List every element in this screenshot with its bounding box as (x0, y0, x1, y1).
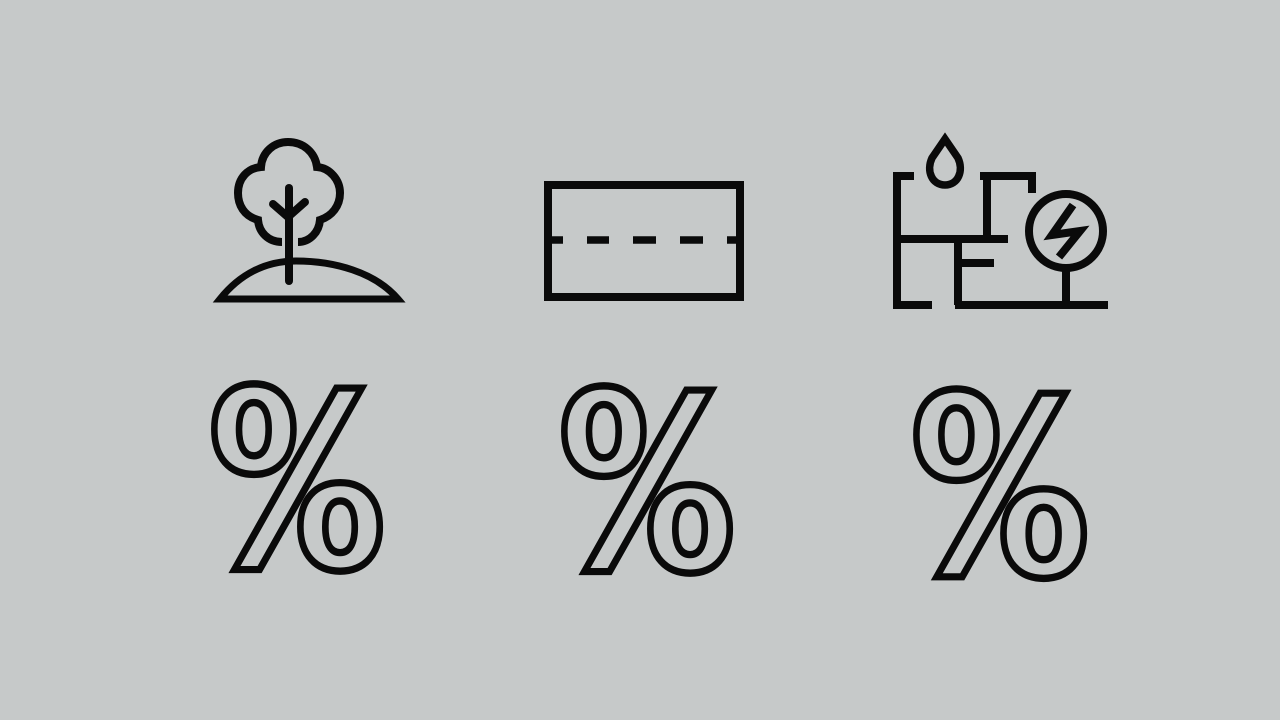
percent sign: tree column: % (183, 362, 386, 621)
percent sign: plot column: % (528, 345, 768, 625)
icon: plot with dashed dividing line (548, 185, 740, 297)
percent sign: tree column: % (208, 342, 411, 607)
percent sign: plot column (561, 382, 734, 577)
percent sign: tree column (211, 380, 384, 575)
icon: water, pipes and electricity utilities (897, 139, 1108, 305)
percent sign: utilities column: % (910, 346, 1116, 615)
percent sign: utilities column (913, 385, 1088, 582)
percent sign: utilities column: % (884, 366, 1090, 629)
icon: tree on a hill (220, 142, 398, 299)
percent sign: tree column: % (178, 343, 418, 623)
percent sign: plot column: % (533, 364, 736, 623)
percent sign: utilities column: % (880, 349, 1123, 631)
percent sign: plot column: % (558, 344, 761, 609)
